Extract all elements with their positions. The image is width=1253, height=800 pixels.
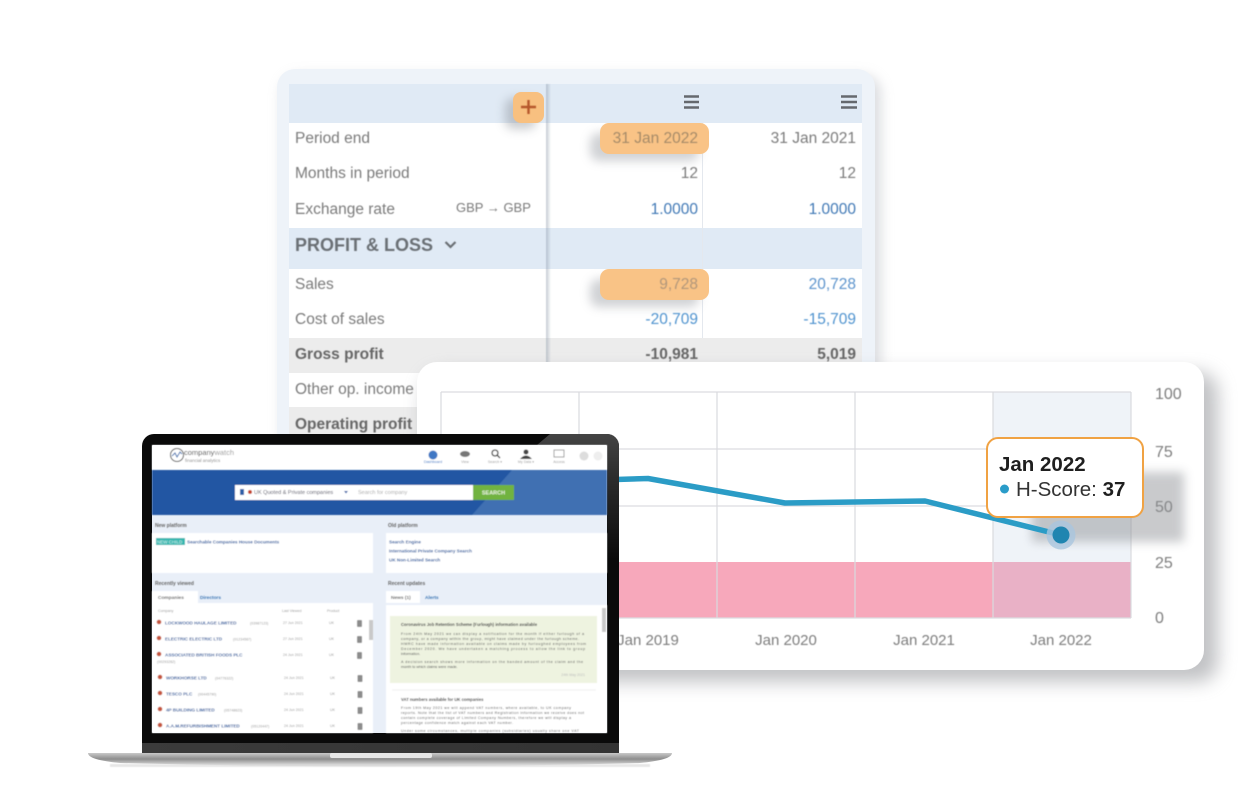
right column: old platforms and recent updates: UK Non-Limited Search xyxy=(389,558,440,562)
right column: old platforms and recent updates: contain complete coverage of Limited Company Numbers, therefore we will display a xyxy=(401,716,572,720)
chart: x axis labels: Jan 2020 xyxy=(755,632,817,649)
left column: platforms and recently viewed: WORKHORSE LTD xyxy=(166,676,207,680)
chart: y axis labels xyxy=(1155,386,1182,627)
laptop screen xyxy=(152,445,607,733)
left column: platforms and recently viewed: 24 Jun 2021 xyxy=(284,708,304,712)
app top bar: View xyxy=(461,460,469,464)
right column: old platforms and recent updates: News (1) xyxy=(391,595,411,601)
table rows text: 5,019 xyxy=(817,346,856,363)
right column: old platforms and recent updates: company, or a company within the group, might have claimed under the furlough scheme. xyxy=(401,637,579,641)
left column: platforms and recently viewed: (03987123) xyxy=(250,622,268,626)
right column: old platforms and recent updates: December 2020. We have undertaken a matching process to allow the link to group xyxy=(401,647,585,651)
right column: old platforms and recent updates: Under some circumstances, multiple companies (subsidiaries) usually share one VAT xyxy=(401,729,580,733)
right column: old platforms and recent updates: From 24th May 2021 we can display a notification for the month if either furlough of a xyxy=(401,632,585,636)
left column: platforms and recently viewed: New platform xyxy=(155,523,187,529)
left column: platforms and recently viewed: LOCKWOOD HAULAGE LIMITED xyxy=(165,620,237,626)
left column: platforms and recently viewed: Last Viewed xyxy=(282,609,302,613)
laptop lid xyxy=(142,434,619,755)
chart: y axis labels: 75 xyxy=(1155,444,1173,461)
table rows text: 1.0000 xyxy=(651,201,698,218)
table rows text xyxy=(295,130,856,433)
chart: y axis labels: 100 xyxy=(1155,386,1182,403)
table rows text: -15,709 xyxy=(803,311,856,328)
left column: platforms and recently viewed: 4P BUILDING LIMITED xyxy=(166,708,215,712)
right column: old platforms and recent updates: A decision search shows more information on the banded amount of the claim and the xyxy=(401,660,583,664)
chart: y axis labels: 50 xyxy=(1155,499,1173,516)
right column: old platforms and recent updates: Coronavirus Job Retention Scheme (Furlough) information available xyxy=(401,622,538,627)
table rows text: Months in period xyxy=(295,165,410,182)
search banner: UK Quoted & Private companies xyxy=(254,490,333,496)
left column: platforms and recently viewed: (00293262) xyxy=(157,660,175,664)
left column: platforms and recently viewed: Company xyxy=(158,609,174,613)
left column: platforms and recently viewed: UK xyxy=(330,708,336,712)
left column: platforms and recently viewed: UK xyxy=(329,653,335,657)
left column: platforms and recently viewed xyxy=(152,523,373,733)
left column: platforms and recently viewed: Directors xyxy=(200,595,221,601)
chart: x axis labels xyxy=(617,632,1092,649)
app top bar: Dashboard xyxy=(424,460,442,464)
chart: y axis labels: 0 xyxy=(1155,610,1164,627)
table rows text: 12 xyxy=(681,165,698,182)
table rows text: 20,728 xyxy=(809,276,856,293)
left column: platforms and recently viewed: 24 Jun 2021 xyxy=(283,653,303,657)
right column: old platforms and recent updates: From 19th May 2021 we will append VAT numbers, where available, to UK company xyxy=(401,706,571,710)
table rows text: Period end xyxy=(295,130,370,147)
chart: plot area xyxy=(441,392,1131,618)
right column: old platforms and recent updates: Recent updates xyxy=(388,581,425,587)
chart: x axis labels: Jan 2021 xyxy=(893,632,955,649)
table rows text: -10,981 xyxy=(645,346,698,363)
left column: platforms and recently viewed: Companies xyxy=(158,595,184,601)
table rows text: Other op. income xyxy=(295,381,414,398)
table rows text: Operating profit xyxy=(295,416,412,433)
app top bar: companywatch xyxy=(184,448,234,457)
left column: platforms and recently viewed: UK xyxy=(330,724,336,728)
left column: platforms and recently viewed: Searchable Companies House Documents xyxy=(187,540,280,544)
left column: platforms and recently viewed: (00445790) xyxy=(198,692,216,696)
search banner: Search for company xyxy=(358,490,407,496)
table rows text: Gross profit xyxy=(295,346,384,363)
table rows text: Sales xyxy=(295,276,334,293)
table rows text: 9,728 xyxy=(659,276,698,293)
right column: old platforms and recent updates: International Private Company Search xyxy=(389,548,472,554)
left column: platforms and recently viewed: 27 Jun 2021 xyxy=(283,621,303,625)
tooltip: H-Score: 37 xyxy=(1016,478,1125,501)
table rows text: Exchange rate xyxy=(295,201,395,218)
right column: old platforms and recent updates: reports. Note that the list of VAT numbers and Registration information we receive does not xyxy=(401,711,584,715)
chart: x axis labels: Jan 2022 xyxy=(1030,632,1092,649)
app top bar: Access xyxy=(553,460,565,464)
left column: platforms and recently viewed: (04776322) xyxy=(215,676,233,680)
app top bar: financial analytics xyxy=(185,458,221,463)
table rows text: GBP → GBP xyxy=(456,200,531,215)
tooltip xyxy=(987,438,1143,517)
tooltip shadow xyxy=(1032,472,1184,542)
left column: platforms and recently viewed: (01234567) xyxy=(233,638,251,642)
chart: y axis labels: 25 xyxy=(1155,555,1173,572)
panel: financial table card xyxy=(277,69,881,455)
left column: platforms and recently viewed: (05748623) xyxy=(224,708,242,712)
table rows text: Cost of sales xyxy=(295,311,385,328)
app top bar: My Data ▾ xyxy=(518,460,534,464)
left column: platforms and recently viewed: Product xyxy=(327,609,339,613)
left column: platforms and recently viewed: (05120447) xyxy=(251,724,269,728)
left column: platforms and recently viewed: UK xyxy=(329,637,335,641)
table rows text: 12 xyxy=(839,165,856,182)
icon: column menu 2022 xyxy=(684,96,699,108)
left column: platforms and recently viewed: 24 Jun 2021 xyxy=(284,724,304,728)
search banner: SEARCH xyxy=(482,490,505,496)
left column: platforms and recently viewed: ELECTRIC ELECTRIC LTD xyxy=(165,636,223,642)
table rows text: PROFIT & LOSS xyxy=(295,235,433,255)
table rows text: -20,709 xyxy=(645,311,698,328)
chart: latest data point xyxy=(1046,520,1076,550)
icon: column menu 2021 xyxy=(841,96,857,108)
left column: platforms and recently viewed: Recently viewed xyxy=(155,581,194,587)
laptop mockup xyxy=(88,434,672,767)
right column: old platforms and recent updates: month to which claims were made. xyxy=(401,665,458,669)
right column: old platforms and recent updates: percentage confidence match against each VAT number. xyxy=(401,721,513,725)
app top bar xyxy=(152,445,607,470)
left column: platforms and recently viewed: 24 Jun 2021 xyxy=(284,676,304,680)
left column: platforms and recently viewed: NEW CHILD xyxy=(157,540,183,544)
laptop base xyxy=(88,753,672,767)
right column: old platforms and recent updates: Alerts xyxy=(425,595,439,601)
table rows text: 31 Jan 2022 xyxy=(613,130,698,147)
chart: x axis labels: Jan 2019 xyxy=(617,632,679,649)
left column: platforms and recently viewed: ASSOCIATED BRITISH FOODS PLC xyxy=(165,652,243,658)
app top bar: Search ▾ xyxy=(488,460,502,464)
highlight: period end xyxy=(590,123,709,161)
table rows text: 1.0000 xyxy=(809,201,856,218)
left column: platforms and recently viewed: 27 Jun 2021 xyxy=(283,637,303,641)
left column: platforms and recently viewed: 24 Jun 2021 xyxy=(284,692,304,696)
right column: old platforms and recent updates xyxy=(386,523,607,733)
table rows text: 31 Jan 2021 xyxy=(771,130,856,147)
right column: old platforms and recent updates: VAT numbers available for UK companies xyxy=(401,697,484,702)
left column: platforms and recently viewed: UK xyxy=(330,676,336,680)
left column: platforms and recently viewed: TESCO PLC xyxy=(166,692,193,696)
left column: platforms and recently viewed: UK xyxy=(330,692,336,696)
right column: old platforms and recent updates: information. xyxy=(401,652,420,656)
icon: add column button xyxy=(505,92,544,129)
right column: old platforms and recent updates: Search Engine xyxy=(389,540,421,544)
right column: old platforms and recent updates: Old platform xyxy=(388,523,418,529)
left column: platforms and recently viewed: A.A.M.REFURBISHMENT LIMITED xyxy=(166,724,240,728)
left column: platforms and recently viewed: UK xyxy=(329,621,335,625)
tooltip: Jan 2022 xyxy=(999,453,1086,476)
highlight: sales xyxy=(590,269,709,307)
chart: H-Score line xyxy=(600,478,1061,535)
right column: old platforms and recent updates: 24th May 2021 xyxy=(561,673,585,677)
right column: old platforms and recent updates: HMRC have made information available on claims made by furloughed employees from xyxy=(401,642,586,646)
panel: H-Score chart card xyxy=(417,362,1218,682)
search banner xyxy=(152,470,607,515)
